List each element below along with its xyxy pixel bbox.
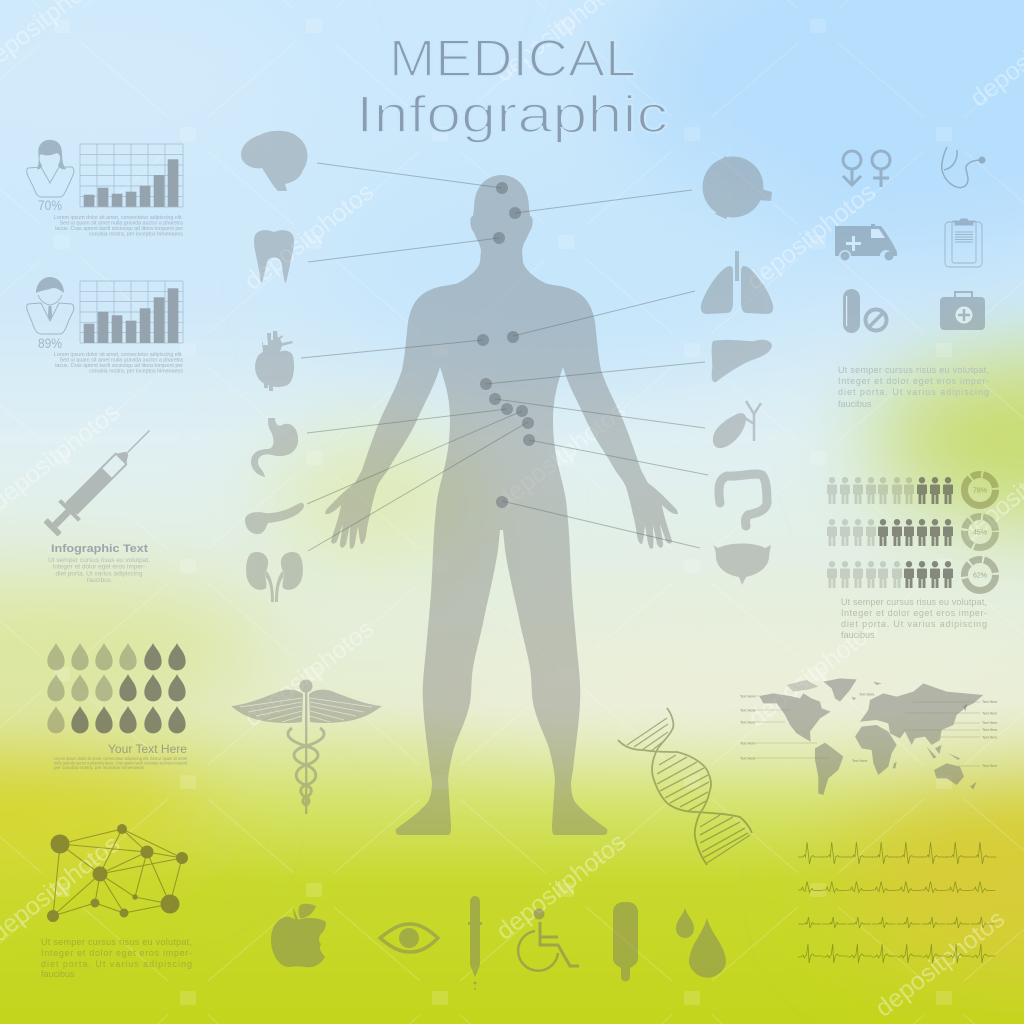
network diagram <box>47 824 188 922</box>
syringe text block: diet porta. Ut varius adipiscing <box>55 570 143 578</box>
icon: bladder <box>713 544 771 585</box>
caption: man chart: lacus. Cras aptent taciti sociosqu ad litora torquent per <box>55 363 183 369</box>
icon: gallbladder <box>713 401 761 448</box>
map labels: Text Here <box>982 728 997 732</box>
icon: medical kit <box>940 292 985 330</box>
network text: diet porta. Ut varius adipiscing <box>41 959 192 969</box>
icon: tooth <box>254 230 294 283</box>
caption: man chart: Lorem ipsum dolor sit amet, consectetur adipiscing elit. <box>54 352 183 358</box>
icon: colon <box>719 474 767 526</box>
caption: woman chart: lacus. Cras aptent taciti sociosqu ad litora torquent per <box>55 226 183 232</box>
map labels: Text Here <box>982 721 997 725</box>
icon: pancreas <box>245 503 304 534</box>
people pictogram: row 62% <box>827 561 953 588</box>
syringe text block: Infographic Text <box>51 543 148 555</box>
icon: syringe <box>41 421 159 539</box>
syringe text block: Ut semper cursus risus eu volutpat, <box>48 557 150 564</box>
text block: upper right: faucibus <box>838 399 872 409</box>
icon: gender symbols <box>843 151 890 187</box>
icon: pill <box>843 289 886 333</box>
text block: people chart: Integer et dolor eget eros imper- <box>841 608 987 618</box>
people pictogram: row 45% <box>827 519 953 546</box>
organ marker dots <box>477 182 535 508</box>
percent label: 70% <box>38 198 62 213</box>
watermark text: depositphotos <box>491 828 631 946</box>
percent label: 89% <box>38 336 62 351</box>
network text: Ut semper cursus risus eu volutpat, <box>41 937 192 947</box>
title <box>356 30 668 144</box>
map labels: Text Here <box>982 700 997 704</box>
map labels: Text Here <box>740 708 755 712</box>
ecg row 1 <box>798 842 996 864</box>
donut 62%: 62% <box>973 572 987 580</box>
watermark text: depositphotos <box>239 615 379 733</box>
icon: lungs <box>701 251 773 314</box>
caption: man chart <box>54 352 183 374</box>
text block: upper right <box>838 365 989 409</box>
network text <box>41 937 192 979</box>
icon: blood drops <box>676 908 726 978</box>
caption: man chart: conubia nostra, per inceptos himenaeos <box>89 368 183 374</box>
syringe text block: Integer et dolor eget eros imper- <box>53 564 145 570</box>
human body silhouette <box>325 175 678 835</box>
map labels: Text Here <box>740 756 755 760</box>
icon: wheelchair <box>518 908 579 971</box>
map labels: Text Here <box>859 692 874 696</box>
icon: dropper <box>468 896 482 990</box>
text block: people chart: faucibus <box>841 630 875 640</box>
people pictogram: row 78% <box>827 477 953 504</box>
map labels: Text Here <box>740 694 755 698</box>
watermark text: depositphotos <box>741 178 881 296</box>
syringe text block <box>48 543 150 584</box>
text block: people chart: diet porta. Ut varius adipiscing <box>841 619 987 629</box>
icon: eye <box>380 924 438 952</box>
caption: woman chart: Lorem ipsum dolor sit amet, consectetur adipiscing elit. <box>54 215 183 221</box>
donut 62% <box>964 560 996 590</box>
network text: Integer et dolor eget eros imper- <box>41 948 192 958</box>
wing feathers <box>240 698 372 722</box>
ecg row 3 <box>798 917 994 928</box>
donut 45% <box>964 516 996 548</box>
icon: apple <box>271 904 326 967</box>
watermark text: depositphotos <box>239 178 379 296</box>
icon: ambulance <box>835 224 897 260</box>
connector lines <box>301 163 708 551</box>
text block: people chart: Ut semper cursus risus eu volutpat, <box>841 597 987 607</box>
world map <box>740 678 997 795</box>
donut 45%: 45% <box>973 530 987 536</box>
map labels: Text Here <box>740 742 755 746</box>
drop pictogram chart <box>47 643 186 733</box>
network text: faucibus <box>41 969 75 979</box>
profile: man 89% <box>27 277 74 351</box>
caption: woman chart: conubia nostra, per inceptos himenaeos <box>89 232 183 238</box>
text block: upper right: Integer et dolor eget eros imper- <box>838 376 989 386</box>
profile: woman 70% <box>27 140 74 213</box>
drop chart caption: nulla gravida auctor a pharetra lacus. Cras aptent taciti sociosqu ad litora torquent <box>54 760 188 766</box>
map labels: Text Here <box>982 736 997 740</box>
watermark text: depositphotos <box>743 615 883 733</box>
donut 78%: 78% <box>973 488 987 494</box>
icon: heart <box>255 331 294 391</box>
map labels: Text Here <box>740 720 755 724</box>
caption: man chart: Sed ut quam sit amet nulla gravida auctor a pharetra <box>60 358 183 364</box>
ecg row 4 <box>798 944 995 963</box>
ecg row 2 <box>798 882 995 892</box>
watermark text: depositphotos <box>491 397 631 515</box>
title: Infographic <box>356 86 668 144</box>
donut 78% <box>964 474 996 506</box>
bar chart: woman <box>80 144 183 207</box>
icon: stethoscope <box>942 147 986 188</box>
icon: kidneys <box>246 552 303 602</box>
drop chart caption: per conubia nostra, per inceptos himenaeos <box>54 765 144 770</box>
map labels: Text Here <box>852 759 867 763</box>
icon: tube <box>613 902 638 982</box>
bar chart: man <box>80 281 183 343</box>
drop chart caption <box>54 742 188 770</box>
icon: man <box>27 277 74 334</box>
syringe text block: faucibus <box>87 577 112 584</box>
caption: woman chart: Sed ut quam sit amet nulla gravida auctor a pharetra <box>60 220 183 226</box>
title: MEDICAL <box>389 30 636 88</box>
drop chart caption: Lorem ipsum dolor sit amet, consectetur adipiscing elit. Sed ut quam sit amet <box>54 756 188 761</box>
icon: caduceus <box>231 680 382 814</box>
map labels <box>740 692 997 768</box>
text block: upper right: Ut semper cursus risus eu volutpat, <box>838 365 989 375</box>
icon: eyeball <box>702 156 772 219</box>
text block: upper right: diet porta. Ut varius adipiscing <box>838 387 989 397</box>
watermark text: depositphotos <box>870 905 1010 1023</box>
caption: woman chart <box>54 215 183 238</box>
icon: liver <box>712 340 772 382</box>
map labels: Text Here <box>982 764 997 768</box>
text block: people chart <box>841 597 987 640</box>
ecg traces <box>798 842 996 963</box>
icon: brain <box>241 131 307 191</box>
drop chart caption: Your Text Here <box>108 742 187 756</box>
icon: dna helix <box>618 708 752 865</box>
icon: woman <box>27 140 74 197</box>
icon: stomach <box>251 418 298 477</box>
icon: clipboard <box>945 219 982 267</box>
map labels: Text Here <box>982 712 997 716</box>
